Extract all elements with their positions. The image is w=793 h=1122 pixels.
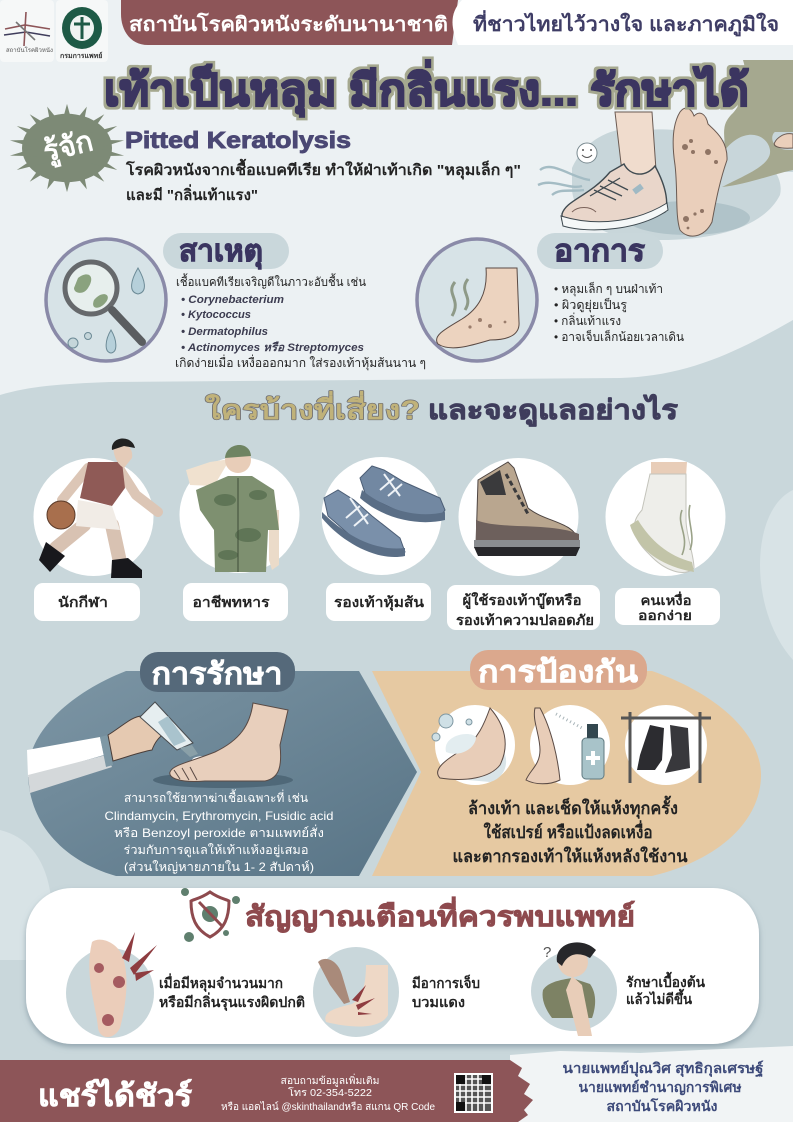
contact text: โทร 02-354-5222 [288,1086,372,1099]
sign: many pits: หรือมีกลิ่นรุนแรงผิดปกติ [159,992,305,1011]
sign: no improvement: แล้วไม่ดีขึ้น [626,988,692,1007]
doctor credit: นายแพทย์ปุณวิศ สุทธิกุลเศรษฐ์ [562,1060,764,1078]
contact text: หรือ แอดไลน์ @skinthailandหรือ สแกน QR Code [221,1101,435,1113]
doctor credit: สถาบันโรคผิวหนัง [606,1097,718,1114]
icon: smile bubble [577,143,597,163]
pill: symptom heading [537,233,663,269]
cause text: • Actinomyces หรือ Streptomyces [181,341,364,354]
icon: wash foot [432,705,515,785]
sole of foot [673,108,727,236]
sign: many pits: เมื่อมีหลุมจำนวนมาก [159,973,283,992]
prevention text: ล้างเท้า และเช็ดให้แห้งทุกครั้ง [468,795,678,819]
label: boots: ผู้ใช้รองเท้าบู๊ตหรือ [462,591,582,609]
icon: spray [526,705,610,785]
sign: pain and swelling: มีอาการเจ็บ [412,974,480,991]
title: เท้าเป็นหลุม มีกลิ่นแรง... รักษาได้ [104,60,749,118]
intro text: และมี "กลิ่นเท้าแรง" [126,184,258,204]
pill: treatment heading [140,652,295,692]
panel: symptoms [417,233,684,361]
pill: prevention heading: การป้องกัน [478,656,639,689]
shoe bottom [322,490,405,557]
sign: pain and swelling [313,947,480,1037]
symptom list: • กลิ่นเท้าแรง [554,312,621,328]
footer [0,1060,533,1122]
sign: many pits [66,932,305,1038]
shoe top [360,466,445,522]
label: closed shoes [326,583,431,621]
warning heading: สัญญาณเตือนที่ควรพบแพทย์ [245,896,635,933]
label: sweaty: ออกง่าย [638,608,692,623]
prevention text [452,795,688,866]
symptom list: • อาจเจ็บเล็กน้อยเวลาเดิน [554,329,684,344]
risk: sweaty sock [606,458,726,576]
cause text: เกิดง่ายเมื่อ เหงื่อออกมาก ใส่รองเท้าหุ้มส้นนาน ๆ [175,354,426,371]
label: soldier [183,583,288,621]
treatment text: Clindamycin, Erythromycin, Fusidic acid [104,809,334,823]
label: boots: รองเท้าความปลอดภัย [456,612,594,628]
contact text [221,1073,435,1113]
heading: who is at risk: ใครบ้างที่เสี่ยง? [205,390,420,425]
header bar: ที่ชาวไทยไว้วางใจ และภาคภูมิใจ [473,9,779,38]
sign: no improvement: ? [543,944,551,961]
label: sweaty: คนเหงื่อ [640,591,692,608]
pill: cause heading: สาเหตุ [179,235,263,270]
badge: know [8,103,126,193]
leg and shoe [561,112,668,230]
icon: shield with virus [181,888,240,942]
label: closed shoes: รองเท้าหุ้มส้น [334,594,424,611]
symptom list [554,281,684,344]
icon: department seal [62,7,102,49]
label: soldier: อาชีพทหาร [192,594,270,610]
icon: foot with odour [417,239,537,361]
cause text: เชื้อแบคทีเรียเจริญดีในภาวะอับชื้น เช่น [176,273,366,289]
sign: no improvement: รักษาเบื้องต้น [626,971,705,990]
logos [0,0,108,62]
QR code [454,1073,493,1113]
pill: symptom heading: อาการ [554,235,645,268]
risk: soldier [180,445,300,573]
treatment text: หรือ Benzoyl peroxide ตามแพทย์สั่ง [114,824,324,840]
subtitle: pitted keratolysis: Pitted Keratolysis [125,127,351,153]
label: athlete: นักกีฬา [58,594,108,610]
illustration: applying cream [27,702,293,793]
risk: boot [458,458,580,576]
panel: causes [46,233,426,371]
treatment text: (ส่วนใหญ่หายภายใน 1- 2 สัปดาห์) [124,860,314,874]
doctor credit [510,1046,793,1122]
label: athlete [34,583,140,621]
treatment text: สามารถใช้ยาทาฆ่าเชื้อเฉพาะที่ เช่น [124,789,308,805]
footer: แชร์ได้ชัวร์ [38,1078,192,1113]
panel: warning signs [26,888,759,1044]
risk: closed shoes [322,457,445,575]
prevention text: และตากรองเท้าให้แห้งหลังใช้งาน [452,846,688,866]
cause text [175,273,426,371]
risk: athlete [34,438,158,578]
icon: institute logo [4,12,50,46]
icon: nose [774,134,793,148]
intro text [125,158,521,204]
header bar [121,0,793,45]
logos: สถาบันโรคผิวหนัง [6,46,53,54]
doctor credit: นายแพทย์ชำนาญการพิเศษ [578,1079,742,1096]
treatment text [104,789,334,874]
heading: who is at risk [205,390,679,427]
icon: breeze [538,167,590,195]
contact text: สอบถามข้อมูลเพิ่มเติม [280,1073,380,1087]
prevention text: ใช้สเปรย์ หรือแป้งลดเหงื่อ [484,820,652,842]
symptom list: • หลุมเล็ก ๆ บนฝ่าเท้า [554,281,663,297]
treatment text: ร่วมกับการดูแลให้เท้าแห้งอยู่เสมอ [124,843,308,858]
panel: prevention [372,650,761,876]
label: boots [447,585,600,630]
badge: know: รู้จัก [40,125,97,170]
odour cloud [722,60,793,187]
intro text: โรคผิวหนังจากเชื้อแบคทีเรีย ทำให้ฝ่าเท้าเกิด "หลุมเล็ก ๆ" [125,158,521,180]
cause text: • Kytococcus [181,309,251,321]
icon: magnifier with bacteria [46,239,166,361]
pill: cause heading [163,233,289,270]
header bar: สถาบันโรคผิวหนังระดับนานาชาติ [129,12,448,36]
heading: who is at risk: และจะดูแลอย่างไร [428,394,679,427]
panel: treatment [27,652,417,876]
panel: risk groups [34,438,726,630]
illustration: feet with odour [538,60,793,241]
sign: no improvement [531,942,705,1036]
pill: treatment heading: การรักษา [152,658,282,691]
icon: drying boots [621,705,711,785]
cause text: • Corynebacterium [181,294,284,306]
logos: กรมการแพทย์ [60,51,102,60]
sign: pain and swelling: บวมแดง [412,994,465,1010]
pill: prevention heading [470,650,647,690]
label: sweaty [615,588,720,625]
symptom list: • ผิวดูยุ่ยเป็นรู [554,297,628,313]
cause text: • Dermatophilus [181,326,268,338]
